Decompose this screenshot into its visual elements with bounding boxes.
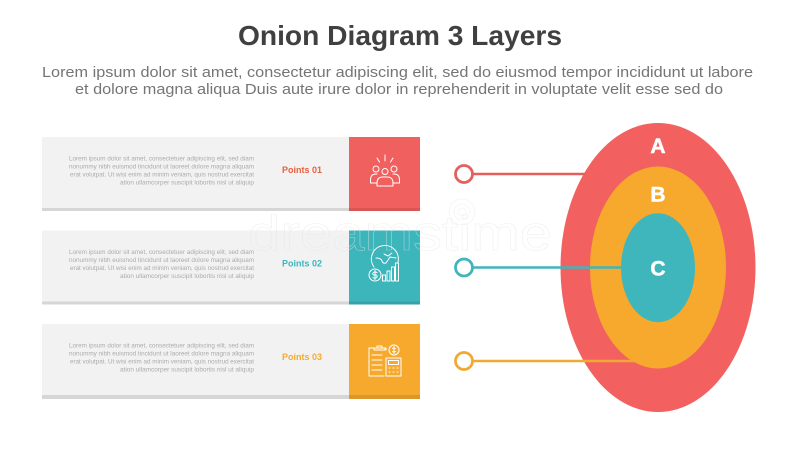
body text 03: Lorem ipsum dolor sit amet, consectetuer adipiscing elit, sed diam	[69, 342, 254, 350]
body text 01: ation ullamcorper suscipit lobortis nisl ut aliquip	[120, 180, 254, 186]
onion diagram	[560, 123, 756, 412]
label: points 01: Points 01	[282, 165, 322, 175]
title: Onion Diagram 3 Layers	[238, 20, 562, 51]
body text 01: Lorem ipsum dolor sit amet, consectetuer adipiscing elit, sed diam	[69, 156, 254, 162]
subtitle text	[42, 64, 753, 98]
label: points 02: Points 02	[282, 258, 322, 268]
subtitle text: Lorem ipsum dolor sit amet, consectetur adipiscing elit, sed do eiusmod tempor incididunt ut labore	[42, 64, 753, 81]
panel: points 02	[42, 230, 420, 304]
body text 02: erat volutpat. Ut wisi enim ad minim veniam, quis nostrud exercitat	[70, 265, 254, 272]
layer A	[560, 123, 756, 412]
body text 02: ation ullamcorper suscipit lobortis nisl ut aliquip	[120, 273, 254, 280]
layer B	[590, 166, 726, 368]
body text 01: erat volutpat. Ut wisi enim ad minim veniam, quis nostrud exercitat	[70, 172, 254, 178]
body text 02: nonummy nibh euismod tincidunt ut laoreet dolore magna aliquam	[69, 257, 254, 264]
letter B: B	[650, 184, 666, 206]
body text 03: ation ullamcorper suscipit lobortis nisl ut aliquip	[120, 366, 254, 374]
body text 02: Lorem ipsum dolor sit amet, consectetuer adipiscing elit, sed diam	[69, 249, 254, 256]
connector: points 03 to layer B	[456, 352, 634, 370]
subtitle text: et dolore magna aliqua Duis aute irure dolor in reprehenderit in voluptate velit esse sed do	[75, 81, 723, 98]
body text 02	[69, 249, 254, 280]
panel: points 01	[42, 137, 420, 211]
connector: points 01 to layer A	[456, 166, 586, 182]
icon: clipboard and calculator	[369, 345, 401, 376]
body text 03: nonummy nibh euismod tincidunt ut laoreet dolore magna aliquam	[69, 350, 254, 358]
layer C	[621, 213, 695, 322]
watermark: dreamstime	[248, 207, 552, 261]
body text 03	[69, 342, 254, 374]
connector: points 02 to layer C	[456, 259, 622, 276]
body text 01	[69, 156, 254, 186]
body text 03: erat volutpat. Ut wisi enim ad minim veniam, quis nostrud exercitat	[70, 358, 254, 366]
label: points 03: Points 03	[282, 352, 322, 362]
body text 01: nonummy nibh euismod tincidunt ut laoreet dolore magna aliquam	[69, 164, 254, 170]
panel: points 03	[42, 324, 420, 399]
letter A: A	[650, 135, 666, 158]
icon: globe and finance chart	[369, 245, 398, 281]
icon: team	[370, 155, 400, 186]
letter C: C	[650, 258, 666, 280]
